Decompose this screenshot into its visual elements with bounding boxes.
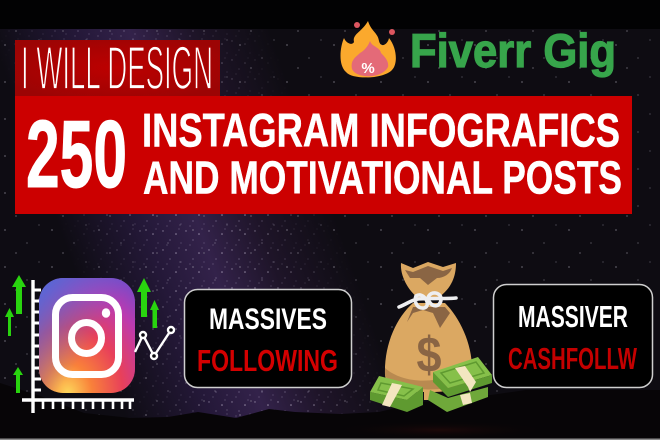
headline banner [15,96,632,214]
callout: massives following: MASSIVES [209,303,327,336]
icon: trend line [135,327,174,359]
callout: massives following: FOLLOWING [197,343,338,378]
heading tag: I will design [15,34,220,102]
icon: chart axes [22,280,134,413]
callout: massives following [184,290,352,388]
icon: instagram logo [39,278,135,393]
bottom edge line [0,438,660,440]
icon: money bag: $ [416,327,442,383]
callout: massiver cashfollw [494,284,652,388]
fire discount icon: % [361,60,375,77]
icon: cash stacks [370,357,492,412]
fire discount icon [340,21,396,77]
text: I WILL DESIGN [21,34,213,102]
bottom ground glow [330,421,550,439]
icon: money bag [385,262,472,400]
fiverr gig label: Fiverr Gig [410,24,616,77]
distant hills silhouette [0,383,660,440]
number 250: 250 [26,101,127,208]
icons: green up arrows [5,275,159,393]
